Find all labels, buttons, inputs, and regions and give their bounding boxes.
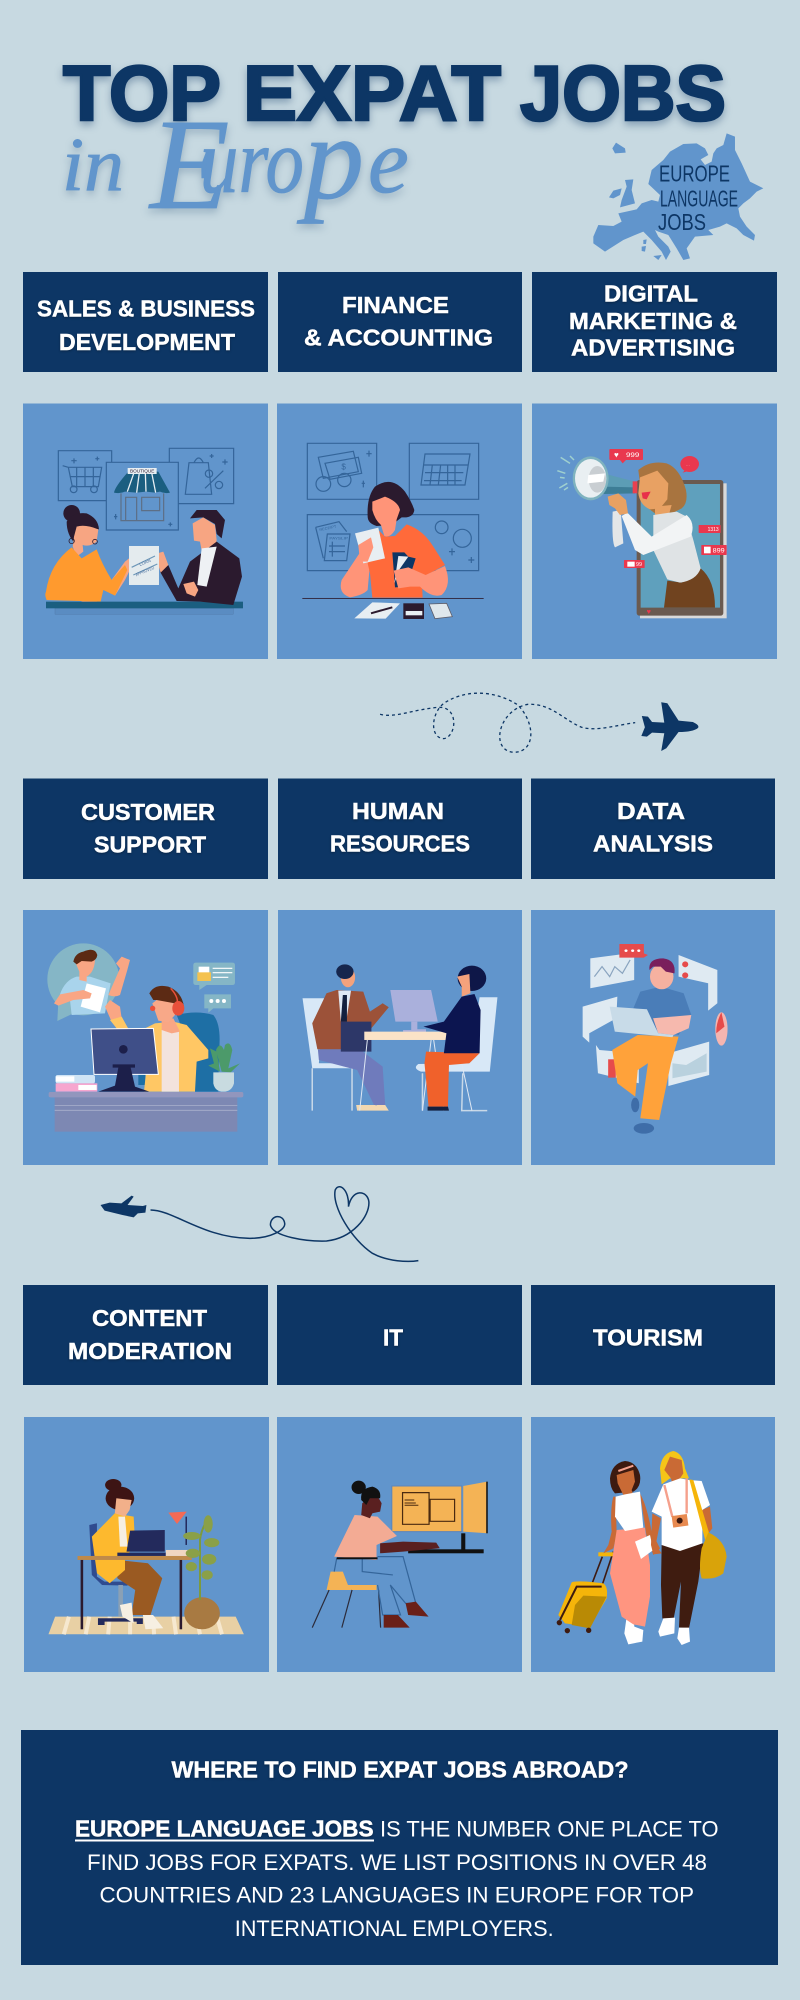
social media bubbles: 1313 (708, 527, 719, 533)
illustration: woman with receipts at a desk: $ (341, 462, 346, 471)
loan approved document: LOAN (138, 558, 151, 567)
man with laptop (610, 958, 691, 1134)
europe map silhouette (593, 133, 763, 260)
heading: data analysis: ANALYSIS (593, 831, 713, 857)
illustration: two people signing a loan at a boutique counter: BOUTIQUE (130, 469, 154, 474)
heading: digital marketing and advertising: DIGITAL (604, 281, 698, 307)
heading: content moderation: MODERATION (68, 1338, 232, 1364)
icon: dotted flight path with plane (380, 693, 698, 752)
loan approved document (129, 546, 159, 585)
callout body text: INTERNATIONAL EMPLOYERS. (235, 1916, 554, 1941)
woman in navy jacket (423, 966, 486, 1111)
heading: finance and accounting: & ACCOUNTING (304, 325, 493, 351)
illustration: woman with receipts at a desk (302, 443, 484, 619)
chair (312, 1572, 381, 1628)
panel: human resources illustration (278, 910, 522, 1165)
illustration: job interview at a table (303, 964, 497, 1111)
panel: content moderation illustration (24, 1417, 269, 1672)
monitors (392, 1482, 488, 1553)
social media bubbles: ♥ (614, 451, 619, 460)
panel: customer support illustration (23, 910, 268, 1165)
seated person (334, 1481, 440, 1628)
heading: IT (277, 1285, 522, 1385)
title: JOBS (520, 49, 726, 137)
woman in yellow shirt (92, 1479, 163, 1629)
social media bubbles (609, 449, 727, 616)
desk chair (89, 1523, 143, 1625)
illustration: woman with receipts at a desk: RECEIPT (319, 524, 338, 532)
man traveller (651, 1451, 727, 1645)
heading: data analysis (531, 778, 775, 879)
panel: marketing illustration (532, 404, 777, 659)
heading: customer support: SUPPORT (94, 832, 206, 858)
heading: finance and accounting: FINANCE (342, 292, 449, 318)
title: TOP (63, 49, 221, 137)
heading: customer support: CUSTOMER (81, 799, 215, 825)
illustration: programmer at desktop screens (312, 1481, 488, 1628)
heading: digital marketing and advertising (532, 272, 777, 372)
subtitle: in Europe: e (368, 110, 409, 212)
callout body text: FIND JOBS FOR EXPATS. WE LIST POSITIONS IN OVER 48 (87, 1850, 707, 1875)
social media bubbles: ♥ (647, 607, 651, 616)
illustration: two travellers with luggage (557, 1451, 727, 1645)
subtitle: in Europe: E (148, 93, 229, 237)
panel: tourism illustration (531, 1417, 775, 1672)
panel: data analysis illustration (531, 910, 775, 1165)
title: EXPAT (243, 49, 501, 137)
logo wordmark: JOBS (658, 209, 706, 235)
heading: finance and accounting (278, 272, 522, 372)
chairs (303, 997, 497, 1111)
heading: tourism: TOURISM (593, 1325, 703, 1351)
logo wordmark: EUROPE (659, 160, 730, 186)
subtitle: in Europe: uro (200, 110, 304, 212)
illustration: woman at laptop with plant (48, 1479, 244, 1634)
heading: sales and business development: DEVELOPMENT (59, 329, 235, 355)
illustration: woman with receipts at a desk: PAYSLIP (329, 536, 349, 540)
heading: sales and business development: SALES & BUSINESS (37, 296, 255, 322)
potted plant (208, 1043, 240, 1092)
floating chart cards (583, 953, 717, 1086)
woman (608, 462, 715, 608)
illustration: man with laptop surrounded by charts (583, 944, 728, 1134)
man with dark jacket (155, 510, 242, 605)
agent with headset (105, 986, 208, 1092)
social media bubbles: ... (686, 462, 690, 467)
man in brown jacket (312, 964, 389, 1111)
callout body text (75, 1816, 718, 1941)
callout body text: COUNTRIES AND 23 LANGUAGES IN EUROPE FOR TOP (100, 1883, 694, 1908)
heading: customer support (23, 778, 268, 879)
callout: where to find expat jobs (21, 1730, 778, 1965)
loan approved document: APPROVED (135, 565, 155, 577)
heading: tourism (531, 1285, 775, 1385)
suitcase (557, 1552, 613, 1633)
icon: heart flight path with plane (101, 1187, 418, 1261)
illustration: call centre agent at a desk (47, 943, 243, 1132)
monitor on table (360, 990, 472, 1111)
title (63, 49, 726, 137)
woman with orange top (45, 505, 134, 604)
woman with orange shirt (341, 482, 448, 598)
illustration: woman with megaphone emerging from phone (557, 449, 727, 618)
heading: content moderation: CONTENT (92, 1305, 207, 1331)
panel: sales illustration (23, 404, 268, 659)
heading: data analysis: DATA (617, 798, 685, 824)
callout heading: WHERE TO FIND EXPAT JOBS ABROAD? (172, 1757, 628, 1783)
heading: human resources (278, 778, 522, 879)
heading: human resources: RESOURCES (330, 831, 470, 857)
heading: human resources: HUMAN (352, 798, 444, 824)
heading: sales and business development (23, 272, 268, 372)
callout body text: IS THE NUMBER ONE PLACE TO (380, 1817, 718, 1842)
panel: IT illustration (277, 1417, 522, 1672)
woman traveller (603, 1461, 660, 1644)
heading: digital marketing and advertising: MARKETING & (569, 308, 737, 334)
panel: finance illustration (277, 404, 522, 659)
subtitle: in Europe: p (296, 91, 364, 224)
logo wordmark (658, 160, 738, 235)
heading: content moderation (23, 1285, 268, 1385)
social media bubbles: 999 (626, 452, 640, 459)
social media bubbles: 99 (636, 562, 642, 568)
laptop and desk (78, 1512, 192, 1629)
logo wordmark: LANGUAGE (660, 186, 738, 212)
social media bubbles: 899 (713, 547, 725, 554)
desktop monitor (91, 1028, 158, 1092)
callout body text: EUROPE LANGUAGE JOBS (75, 1816, 374, 1842)
subtitle: in Europe: in (62, 123, 124, 207)
logo: Europe Language Jobs map (593, 133, 763, 260)
illustration: two people signing a loan at a boutique counter (45, 448, 243, 614)
potted plant (183, 1515, 220, 1629)
heading: IT: IT (383, 1325, 403, 1351)
subtitle: in Europe (62, 91, 409, 237)
heading: digital marketing and advertising: ADVERTISING (571, 335, 735, 361)
